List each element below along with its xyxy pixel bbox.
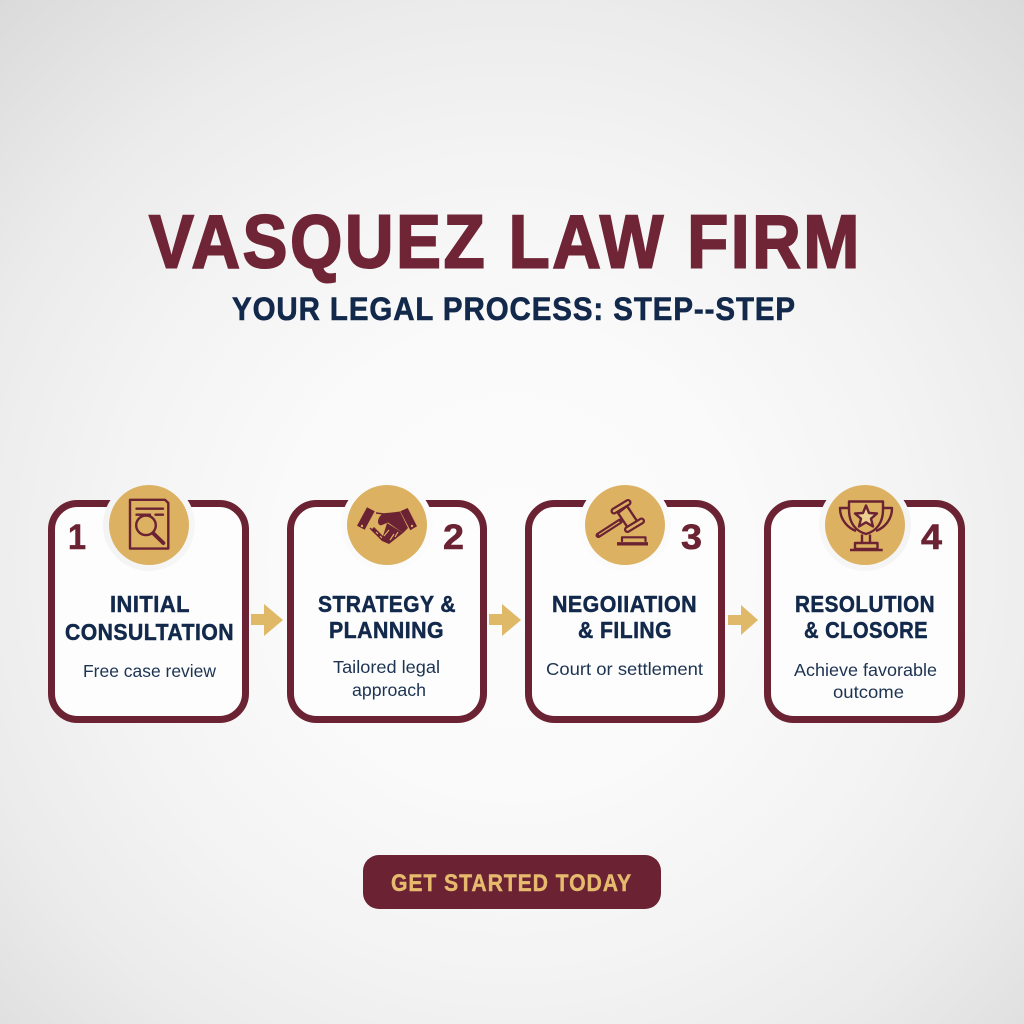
icon: handshake — [347, 485, 427, 565]
step number 2: 2 — [443, 518, 464, 557]
step 2 description — [333, 657, 440, 700]
step 2 description: approach — [352, 680, 426, 700]
icon: trophy with star — [825, 485, 905, 565]
call to action button — [363, 855, 661, 909]
panel: step 2 strategy and planning — [290, 479, 484, 720]
step 3 description: Court or settlement — [546, 659, 703, 679]
step 3 heading: & FILING — [578, 617, 672, 643]
arrow 3 to 4 — [728, 605, 758, 635]
step 4 description: Achieve favorable — [794, 660, 937, 680]
panel: step 3 negotiation and filing — [528, 479, 722, 720]
icon: gavel — [585, 485, 665, 565]
step number 4: 4 — [921, 518, 943, 557]
step number 1: 1 — [68, 518, 86, 557]
step 4 description — [794, 660, 937, 702]
step 2 heading: STRATEGY & — [318, 591, 456, 617]
step 3 heading: NEGOIIATION — [552, 591, 697, 617]
step 4 description: outcome — [833, 682, 904, 702]
step 1 heading: INITIAL — [110, 591, 190, 617]
step 1 description: Free case review — [83, 661, 216, 681]
arrow 2 to 3 — [489, 604, 521, 636]
panel: step 4 resolution and closure — [768, 479, 962, 720]
step 1 heading: CONSULTATION — [65, 619, 234, 645]
step 2 description: Tailored legal — [333, 657, 440, 677]
step 4 heading: RESOLUTION — [795, 591, 935, 617]
button label: GET STARTED TODAY — [391, 870, 632, 897]
step 2 heading — [318, 591, 456, 643]
subtitle: YOUR LEGAL PROCESS: STEP--STEP — [232, 291, 796, 327]
arrow 1 to 2 — [251, 604, 283, 636]
step 1 heading — [65, 591, 234, 645]
icon: document with magnifier — [109, 485, 189, 565]
title: VASQUEZ LAW FIRM — [149, 200, 862, 284]
panel: step 1 initial consultation — [52, 479, 246, 720]
step 4 heading — [795, 591, 935, 643]
step 4 heading: & CLOSORE — [804, 617, 928, 643]
step number 3: 3 — [681, 518, 702, 557]
step 3 heading — [552, 591, 697, 643]
step 2 heading: PLANNING — [329, 617, 444, 643]
